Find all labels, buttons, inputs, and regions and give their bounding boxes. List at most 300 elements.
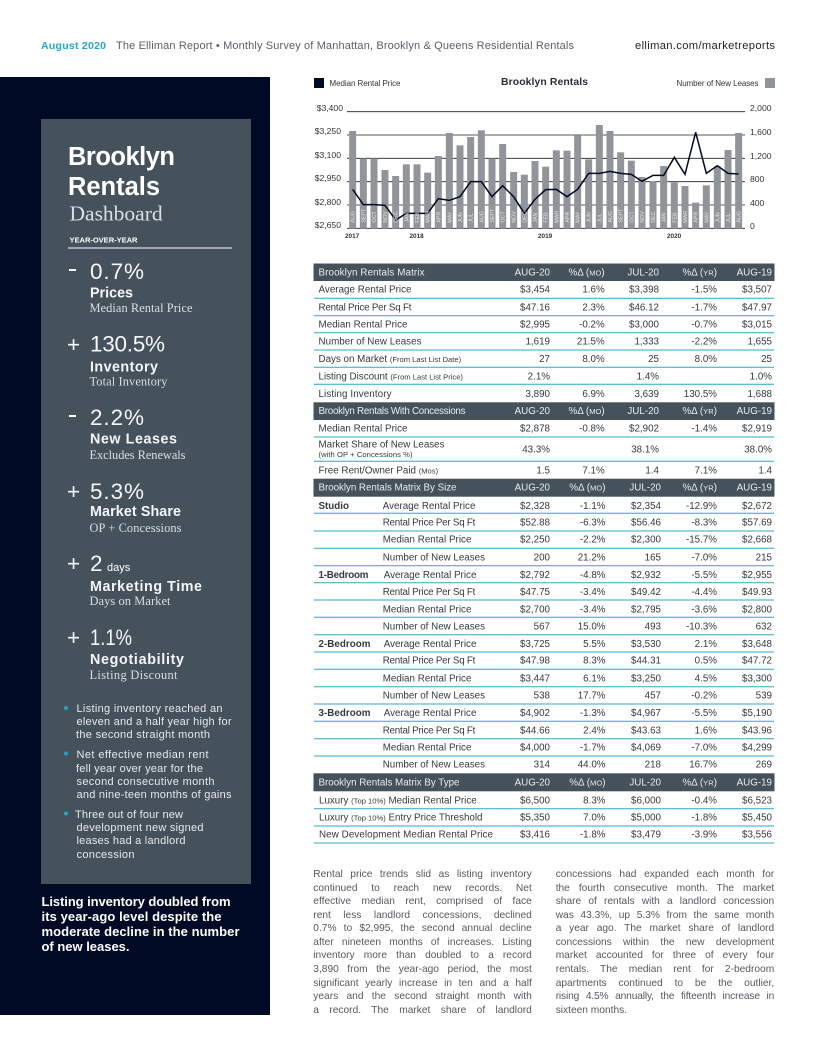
row: Free Rent/Owner Paid (Mos) [318, 466, 439, 477]
row [383, 518, 772, 529]
callout: Listing inventory doubled from [42, 894, 230, 909]
row: 43.3% [522, 445, 550, 456]
row: $3,416 [520, 830, 551, 841]
bullet points: second consecutive month [76, 776, 214, 788]
month labels: DEC [522, 211, 528, 223]
row: 539 [756, 691, 772, 702]
year labels [345, 233, 682, 240]
year labels: 2018 [410, 233, 424, 240]
row: $5,350 [520, 813, 551, 824]
row: $52.88 [520, 518, 551, 529]
page header [41, 40, 775, 52]
row: -6.3% [580, 518, 606, 529]
row: 200 [534, 553, 551, 564]
month labels: JAN [533, 212, 539, 223]
row: 567 [534, 622, 550, 633]
row: Median Rental Price [318, 424, 408, 435]
page header: elliman.com/marketreports [635, 40, 775, 52]
month labels: AUG [351, 211, 357, 223]
row: $2,932 [631, 570, 661, 581]
row: -1.4% [691, 424, 717, 435]
chart legend and title: Median Rental Price [330, 79, 401, 88]
row: $2,919 [742, 424, 772, 435]
month labels: OCT [501, 211, 507, 223]
row: -3.6% [691, 605, 717, 616]
row: -15.7% [686, 535, 717, 546]
header row [314, 264, 774, 281]
month labels: MAY [576, 211, 582, 223]
month labels: JUL [726, 213, 732, 223]
chart legend and title: Brooklyn Rentals [501, 77, 588, 88]
row: 1.4 [758, 466, 773, 477]
row: $4,069 [631, 743, 661, 754]
row: 538 [534, 691, 551, 702]
body text: column two: apartments continued to be the outlier, [556, 978, 774, 988]
row: -1.1% [580, 501, 606, 512]
row: 1.5 [536, 466, 551, 477]
row: $47.98 [520, 656, 551, 667]
row [318, 708, 773, 719]
header row: %Δ (YR) [682, 483, 717, 494]
row: $46.12 [629, 303, 659, 314]
row: $3,000 [629, 320, 660, 331]
row [383, 760, 772, 771]
stat: prices: Median Rental Price [90, 301, 193, 315]
header row: JUL-20 [627, 268, 660, 279]
row: 21.2% [578, 553, 606, 564]
row: 2.1% [528, 372, 550, 383]
row: -12.9% [686, 501, 717, 512]
row: -3.4% [580, 605, 606, 616]
month labels: DEC [394, 211, 400, 223]
month labels: MAR [683, 211, 689, 223]
row: 314 [534, 760, 551, 771]
row: $3,507 [742, 285, 772, 296]
header row [314, 479, 774, 497]
row: 8.0% [695, 354, 717, 365]
row: Median Rental Price [383, 605, 472, 616]
row: New Development Median Rental Price [319, 830, 494, 841]
row: -5.5% [691, 708, 717, 719]
body text: column two: concessions within the new development [556, 937, 774, 948]
row: Average Rental Price [318, 285, 412, 296]
month labels: JUL [469, 213, 475, 223]
bars: number of new leases [349, 125, 742, 228]
row [318, 389, 773, 400]
stat: negotiability [67, 625, 184, 682]
row: $6,500 [520, 796, 551, 807]
page header: The Elliman Report • Monthly Survey of Manhattan, Brooklyn & Queens Residential Rentals [116, 40, 574, 52]
month labels: AUG [479, 211, 485, 223]
row: -3.9% [691, 830, 717, 841]
body text: column one: inventory more than doubled to a record [313, 950, 532, 961]
row: -2.2% [691, 337, 717, 348]
stat: negotiability: Negotiability [90, 652, 184, 668]
month labels: JUN [587, 212, 593, 223]
row: Luxury (Top 10%) Median Rental Price [319, 796, 477, 807]
body text: column two: rentals. The median rent for 2-bedroom [556, 964, 774, 975]
row: $2,902 [629, 424, 659, 435]
body text: column one: years and the second straight month with [313, 991, 532, 1002]
row: $2,795 [631, 605, 662, 616]
row: $47.72 [742, 656, 772, 667]
row: -1.7% [691, 303, 717, 314]
row: Listing Inventory [318, 389, 392, 400]
right axis labels: 1,200 [750, 151, 772, 161]
row: 1,688 [747, 389, 773, 400]
row: $2,354 [631, 501, 662, 512]
row: 25 [648, 354, 660, 365]
header row [314, 773, 774, 791]
row: 8.0% [582, 354, 605, 365]
chart legend and title: Number of New Leases [676, 79, 758, 88]
header row: %Δ (MO) [568, 268, 605, 279]
row: -7.0% [691, 553, 717, 564]
section: matrix [314, 264, 774, 400]
row: -0.2% [691, 691, 717, 702]
row: $49.42 [631, 587, 661, 598]
row: 16.7% [689, 760, 717, 771]
row: 3-Bedroom [318, 708, 371, 719]
row: $2,672 [742, 501, 772, 512]
row: Number of New Leases [383, 760, 485, 771]
row: $3,398 [629, 285, 660, 296]
header row: AUG-19 [737, 778, 772, 789]
row: $2,700 [520, 605, 551, 616]
body text: column two: a year ago. The market share of landlord [556, 923, 774, 934]
row: Average Rental Price [384, 639, 477, 650]
body text: column one [313, 869, 532, 1016]
month labels: OCT [372, 211, 378, 223]
month labels: APR [436, 212, 442, 223]
header row: AUG-19 [737, 406, 772, 417]
month labels [351, 208, 743, 223]
month labels: FEB [672, 212, 678, 223]
stat: new leases: Excludes Renewals [90, 448, 186, 462]
row: $3,556 [742, 830, 773, 841]
row: $2,668 [742, 535, 773, 546]
row: 2.1% [695, 639, 717, 650]
row: Rental Price Per Sq Ft [383, 587, 476, 598]
body text: column one: 3,890 from the year-ago period, the most [313, 964, 532, 975]
row [318, 639, 773, 650]
month labels: JUL [597, 213, 603, 223]
row: $56.46 [631, 518, 662, 529]
body text: column two: market accounted for three of every four [556, 950, 774, 961]
stat: market share [67, 479, 182, 535]
row: Average Rental Price [384, 570, 477, 581]
row [383, 743, 772, 754]
callout: its year-ago level despite the [42, 909, 222, 924]
row: 1.6% [695, 726, 717, 737]
row [318, 320, 773, 331]
row [383, 535, 773, 546]
header row: JUL-20 [629, 483, 662, 494]
row: 8.3% [583, 656, 606, 667]
stat: negotiability: + [67, 625, 80, 650]
body text: column one: continued to reach new records. Net [313, 883, 532, 894]
row: $4,902 [520, 708, 550, 719]
row: $49.93 [742, 587, 773, 598]
row: -2.2% [580, 535, 606, 546]
header row: Brooklyn Rentals Matrix [318, 268, 425, 279]
row: $44.66 [520, 726, 551, 737]
row: Rental Price Per Sq Ft [383, 726, 476, 737]
header row: Brooklyn Rentals Matrix By Type [318, 778, 460, 789]
right axis labels: 0 [750, 221, 755, 231]
stat: prices [69, 259, 193, 315]
row: $44.31 [631, 656, 661, 667]
section: by size [314, 479, 774, 771]
month labels: SEPT [490, 208, 496, 223]
row: $2,878 [520, 424, 551, 435]
header row: %Δ (MO) [568, 406, 605, 417]
chart legend and title [314, 77, 775, 88]
dashboard title: Dashboard [70, 202, 163, 226]
row: -8.3% [691, 518, 717, 529]
month labels: FEB [415, 212, 421, 223]
row: $6,000 [631, 796, 662, 807]
row: Median Rental Price [383, 535, 472, 546]
right axis labels: 800 [750, 174, 765, 184]
stat: inventory [67, 332, 168, 388]
header row: JUL-20 [627, 406, 660, 417]
row: Number of New Leases [383, 553, 485, 564]
bullet points: development new signed [76, 822, 204, 834]
row: $3,648 [742, 639, 773, 650]
body text: column one: significant yearly increase in ten and a half [313, 978, 532, 988]
month labels: SEPT [361, 208, 367, 223]
row: -1.8% [691, 813, 717, 824]
row: 457 [645, 691, 661, 702]
row: 7.0% [583, 813, 606, 824]
row [319, 796, 773, 807]
month labels: FEB [544, 212, 550, 223]
row [383, 553, 773, 564]
row: -1.7% [580, 743, 606, 754]
year-over-year heading: YEAR-OVER-YEAR [70, 236, 138, 245]
row: 1.6% [582, 285, 605, 296]
dashboard title: Rentals [68, 173, 160, 201]
row: 269 [756, 760, 772, 771]
row [318, 466, 773, 477]
row: Median Rental Price [383, 674, 472, 685]
dashboard title [68, 143, 175, 226]
stat: new leases [69, 405, 186, 462]
row: $5,450 [742, 813, 773, 824]
chart: Brooklyn Rentals [314, 77, 775, 240]
row [383, 674, 773, 685]
row: 1.4% [637, 372, 659, 383]
row: 2.4% [583, 726, 606, 737]
row: -1.8% [580, 830, 606, 841]
row: -0.7% [691, 320, 717, 331]
left axis labels: $3,400 [317, 103, 343, 113]
stat: market share: OP + Concessions [90, 521, 182, 535]
row [318, 303, 772, 314]
row: -5.5% [691, 570, 717, 581]
row: $57.69 [742, 518, 772, 529]
row: Number of New Leases [383, 622, 485, 633]
row: 25 [761, 354, 773, 365]
row: $3,250 [631, 674, 662, 685]
stat: marketing time: + [67, 551, 80, 576]
row: 1,333 [634, 337, 660, 348]
row: $2,955 [742, 570, 773, 581]
month labels: DEC [651, 211, 657, 223]
row: 0.5% [695, 656, 717, 667]
right axis labels: 2,000 [750, 103, 772, 113]
body text: column one: Rental price trends slid as listing inventory [313, 869, 532, 880]
row: $6,523 [742, 796, 773, 807]
row: $43.96 [742, 726, 773, 737]
bullet points: Three out of four new [75, 809, 183, 821]
section: by type [314, 773, 774, 841]
row: Rental Price Per Sq Ft [383, 656, 476, 667]
header row: %Δ (YR) [682, 268, 717, 279]
row: 8.3% [583, 796, 606, 807]
row: 1-Bedroom [318, 570, 369, 581]
row: 1,619 [525, 337, 550, 348]
stat: new leases: New Leases [90, 432, 177, 448]
row: $47.16 [520, 303, 551, 314]
row: $3,479 [631, 830, 661, 841]
section: concessions [314, 402, 774, 477]
bullet points: and nine-teen months of gains [76, 789, 232, 801]
row: $2,792 [520, 570, 550, 581]
stat: prices: 0.7% [90, 259, 144, 284]
header row: Brooklyn Rentals With Concessions [318, 406, 466, 417]
row: Number of New Leases [383, 691, 485, 702]
row: (with OP + Concessions %) [318, 450, 413, 459]
header row: AUG-20 [515, 268, 551, 279]
month labels: JUN [458, 212, 464, 223]
row [318, 285, 772, 296]
body text: column two: the fourth consecutive month. The market [556, 883, 774, 894]
stat: market share: Market Share [90, 504, 181, 520]
header row: AUG-19 [737, 483, 772, 494]
month labels: MAY [447, 211, 453, 223]
stat: marketing time: 2 [90, 551, 103, 576]
month labels: OCT [629, 211, 635, 223]
month labels: SEPT [619, 208, 625, 223]
row: $2,328 [520, 501, 551, 512]
row: Market Share of New Leases [318, 440, 445, 451]
bullet points: concession [76, 849, 134, 861]
right axis labels: 1,600 [750, 127, 772, 137]
row: 21.5% [577, 337, 605, 348]
row: $43.63 [631, 726, 662, 737]
row: $5,000 [631, 813, 662, 824]
bullet points: eleven and a half year high for [76, 716, 232, 728]
row: 27 [539, 354, 550, 365]
row: $3,530 [631, 639, 662, 650]
row: -4.8% [580, 570, 606, 581]
header row: %Δ (MO) [569, 483, 606, 494]
left axis labels [315, 103, 343, 230]
row: $3,454 [520, 285, 551, 296]
stat: inventory: + [67, 332, 80, 357]
row [383, 726, 773, 737]
stat: inventory: Total Inventory [90, 374, 168, 388]
callout: moderate decline in the number [42, 924, 240, 939]
month labels: AUG [608, 211, 614, 223]
month labels: JUN [715, 212, 721, 223]
body text: column one: effective median rent, comprised of face [313, 896, 532, 907]
grid lines [347, 112, 745, 228]
row: 7.1% [582, 466, 605, 477]
month labels: APR [565, 212, 571, 223]
month labels: NOV [640, 211, 646, 223]
row: 1.4 [645, 466, 660, 477]
row: 215 [756, 553, 773, 564]
row: 1,655 [747, 337, 773, 348]
row: Median Rental Price [318, 320, 408, 331]
header row: AUG-20 [515, 406, 551, 417]
row [383, 605, 773, 616]
row [319, 813, 773, 824]
row [318, 337, 773, 348]
body text: column one: 0.7% to $2,995, the second annual decline [313, 923, 532, 934]
page header: August 2020 [41, 40, 106, 52]
row: -10.3% [686, 622, 717, 633]
header row: %Δ (MO) [569, 778, 606, 789]
row: $3,447 [520, 674, 550, 685]
row [383, 656, 772, 667]
row: Rental Price Per Sq Ft [318, 303, 412, 314]
row: 632 [756, 622, 772, 633]
row [383, 622, 772, 633]
row: 130.5% [684, 389, 717, 400]
row: Average Rental Price [383, 501, 476, 512]
row: 1.0% [750, 372, 772, 383]
header row [314, 402, 774, 420]
row: 17.7% [578, 691, 606, 702]
row: -0.2% [579, 320, 605, 331]
stat: inventory: 130.5% [90, 332, 165, 357]
row: Studio [318, 501, 349, 512]
header row: AUG-20 [515, 778, 551, 789]
body text: column one: after nineteen months of increases. Listing [313, 937, 532, 948]
row: 493 [645, 622, 662, 633]
header row: Brooklyn Rentals Matrix By Size [318, 483, 457, 494]
stat: marketing time: Marketing Time [90, 579, 202, 595]
body text: column two: was 43.3%, up 5.3% from the same month [556, 910, 774, 921]
left axis labels: $3,250 [315, 126, 341, 136]
callout [42, 894, 240, 954]
row: $2,800 [742, 605, 773, 616]
row: $2,300 [631, 535, 662, 546]
month labels: NOV [383, 211, 389, 223]
row [319, 830, 773, 841]
row [383, 691, 772, 702]
month labels: NOV [512, 211, 518, 223]
row: 4.5% [695, 674, 717, 685]
month labels: MAR [426, 211, 432, 223]
right axis labels: 400 [750, 198, 765, 208]
bullet points [64, 703, 232, 861]
header row: AUG-19 [737, 268, 772, 279]
bullet points: fell year over year for the [76, 763, 203, 775]
row: 6.1% [583, 674, 606, 685]
row: Days on Market (From Last List Date) [318, 354, 462, 365]
row: Median Rental Price [383, 743, 472, 754]
stat: market share: + [67, 479, 80, 504]
row: -7.0% [691, 743, 717, 754]
row: -4.4% [691, 587, 717, 598]
row: -1.3% [580, 708, 606, 719]
row: 165 [645, 553, 662, 564]
